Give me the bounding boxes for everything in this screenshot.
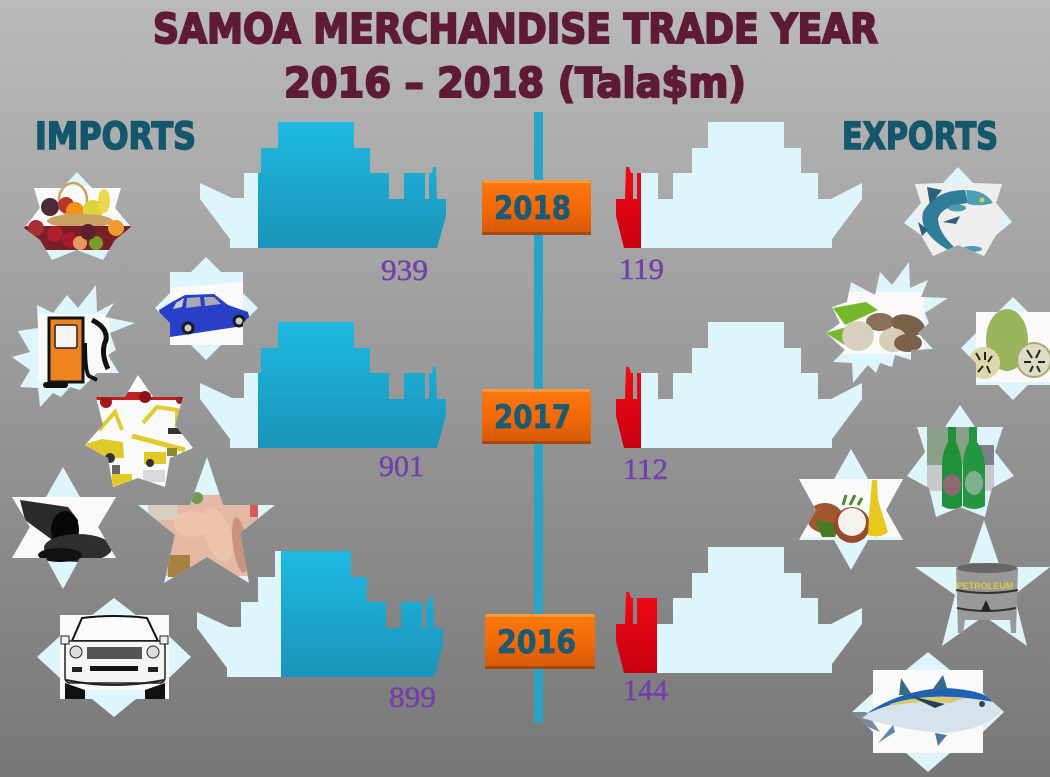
heading: imports: IMPORTS bbox=[35, 115, 196, 158]
exports ship 2016 bbox=[616, 547, 862, 673]
value: exports 2017: 112 bbox=[623, 453, 668, 486]
year box 2018: 2018 bbox=[494, 189, 571, 227]
icon: fuel pump bbox=[12, 285, 135, 407]
value: imports 2018: 939 bbox=[381, 254, 428, 287]
icon: petroleum drum bbox=[915, 520, 1050, 646]
year box 2016: 2016 bbox=[497, 623, 576, 661]
icon: oil barrel bbox=[12, 467, 116, 589]
icon: petroleum drum: PETROLEUM bbox=[957, 581, 1013, 591]
icon: taro roots bbox=[826, 262, 948, 383]
imports ship 2017 bbox=[200, 322, 446, 448]
value: imports 2016: 899 bbox=[389, 681, 436, 714]
exports ship 2018 bbox=[616, 122, 862, 248]
icon: construction machinery bbox=[85, 375, 193, 487]
central timeline bbox=[534, 112, 543, 723]
year box 2017: 2017 bbox=[494, 398, 571, 436]
heading: exports: EXPORTS bbox=[842, 115, 998, 158]
value: exports 2016: 144 bbox=[623, 674, 668, 707]
title: SAMOA MERCHANDISE TRADE YEAR bbox=[153, 5, 878, 53]
exports ship 2017 bbox=[616, 322, 862, 448]
icon: fruit basket bbox=[24, 172, 132, 260]
year box 2018 bbox=[482, 180, 591, 235]
icon: salmon fish bbox=[904, 167, 1012, 256]
icon: coconut and oil bbox=[799, 449, 903, 570]
icon: pickup truck front bbox=[37, 598, 191, 717]
icon: tuna bbox=[852, 652, 1004, 772]
value: exports 2018: 119 bbox=[619, 253, 664, 286]
year box 2017 bbox=[482, 389, 591, 444]
title bbox=[153, 5, 878, 107]
imports ship 2018 bbox=[200, 122, 446, 248]
icon: noni fruit bbox=[961, 297, 1050, 400]
title: 2016 – 2018 (Tala$m) bbox=[284, 59, 746, 107]
icon: blue car bbox=[155, 257, 258, 360]
value: imports 2017: 901 bbox=[379, 450, 424, 483]
icon: beer bottles bbox=[907, 405, 1014, 517]
imports ship 2016 bbox=[197, 551, 443, 677]
year box 2016 bbox=[485, 614, 595, 669]
icon: chicken drumsticks bbox=[138, 457, 275, 583]
